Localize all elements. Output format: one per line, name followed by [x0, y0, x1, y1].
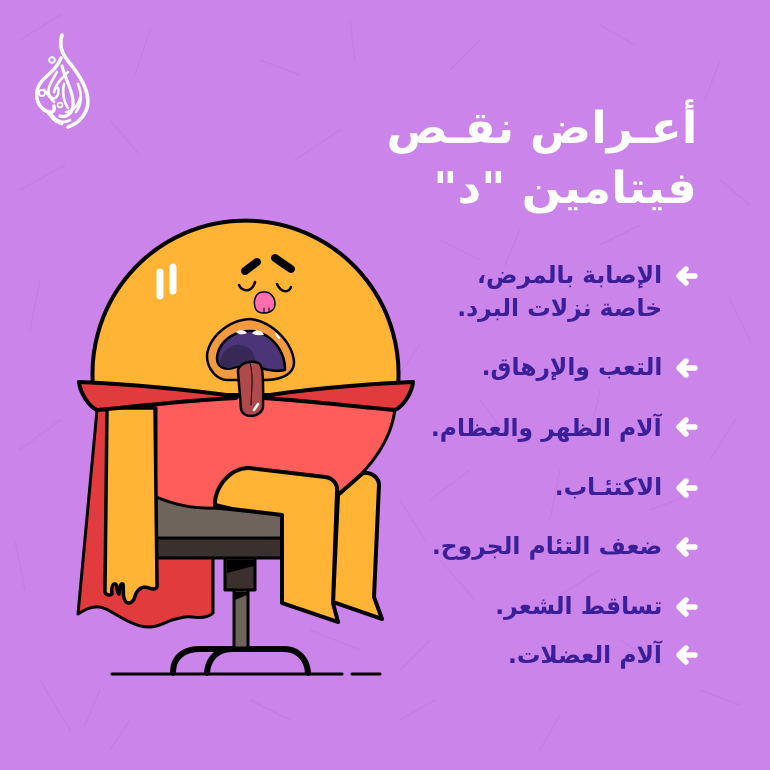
mouth	[207, 319, 294, 380]
tongue	[238, 362, 263, 416]
front leg	[215, 468, 338, 622]
eyebrows	[245, 258, 291, 271]
item 3: آلام الظهر والعظام.	[431, 414, 662, 442]
head	[93, 221, 399, 395]
closed eyes	[239, 282, 291, 291]
item 4: الاكتئـاب.	[555, 473, 662, 501]
item 5: ضعف التئام الجروح.	[432, 532, 662, 560]
symptom list	[431, 261, 662, 669]
item 1: الإصابة بالمرض،	[477, 261, 662, 289]
scarf	[79, 382, 413, 410]
chair base	[112, 649, 380, 674]
item 1: خاصة نزلات البرد.	[457, 294, 662, 322]
highlight	[160, 267, 173, 296]
chair post	[225, 558, 255, 648]
title	[386, 99, 697, 214]
body	[96, 396, 395, 530]
item 6: تساقط الشعر.	[495, 592, 662, 620]
item 1	[457, 261, 662, 322]
title: أعـراض نقـص	[386, 103, 697, 154]
title: فيتامين "د"	[433, 163, 697, 214]
arm	[105, 408, 157, 603]
cape	[78, 410, 213, 627]
nose	[254, 292, 275, 313]
seat	[156, 497, 282, 558]
item 2: التعب والإرهاق.	[481, 353, 662, 381]
back leg	[333, 473, 382, 619]
item 7: آلام العضلات.	[508, 641, 662, 669]
